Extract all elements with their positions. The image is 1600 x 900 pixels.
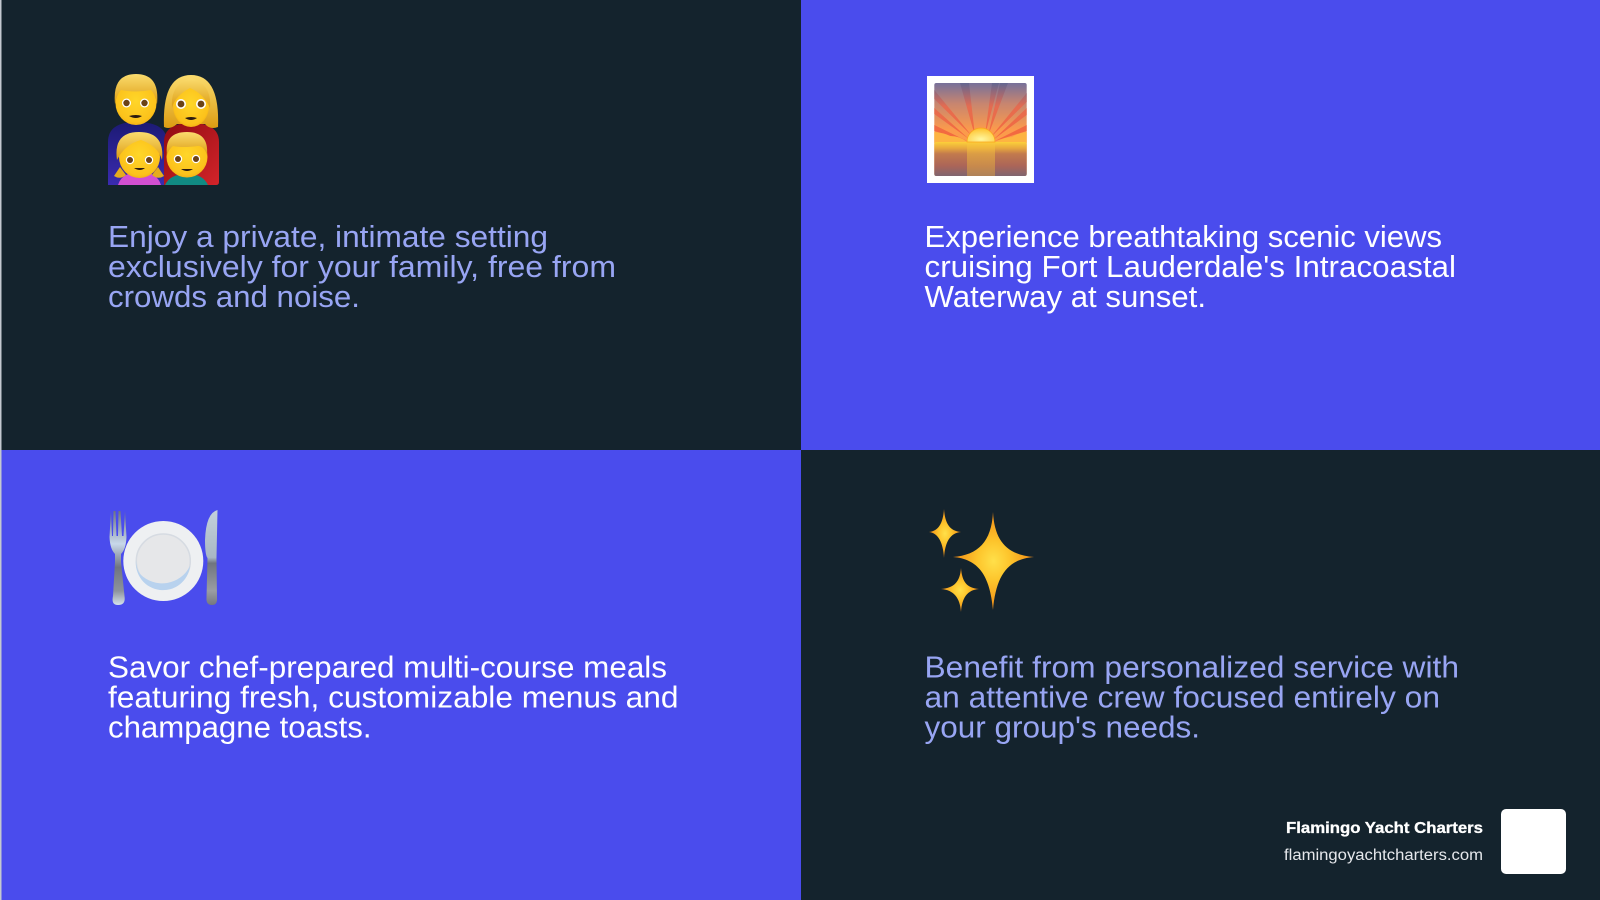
- panel: private setting: [2, 0, 801, 450]
- footer: brand block: [1284, 809, 1566, 874]
- panel: personalized service: [801, 450, 1600, 900]
- icon: sparkles: [929, 509, 1034, 612]
- website url: flamingoyachtcharters.com: [1284, 847, 1483, 864]
- icon: family: [108, 74, 219, 185]
- text: gourmet dining: featuring fresh, customizable menus and: [108, 680, 678, 715]
- text: personalized service: an attentive crew focused entirely on: [924, 680, 1440, 715]
- text: personalized service: your group's needs.: [924, 710, 1200, 745]
- text: private setting: crowds and noise.: [108, 279, 360, 314]
- text: gourmet dining: champagne toasts.: [108, 710, 372, 745]
- text: scenic views: [924, 219, 1456, 314]
- panel: scenic views: [801, 0, 1600, 450]
- text: personalized service: [924, 650, 1459, 745]
- text: scenic views: cruising Fort Lauderdale's Intracoastal: [924, 249, 1456, 284]
- brand name: Flamingo Yacht Charters: [1286, 820, 1483, 837]
- logo placeholder: [1501, 809, 1566, 874]
- icon: sunset picture: [927, 76, 1034, 183]
- text: private setting: [108, 219, 616, 314]
- icon: plate and cutlery: [110, 510, 218, 605]
- text: gourmet dining: [108, 650, 678, 745]
- text: gourmet dining: Savor chef-prepared multi-course meals: [108, 650, 667, 685]
- panel: gourmet dining: [2, 450, 801, 900]
- text: scenic views: Waterway at sunset.: [924, 279, 1206, 314]
- text: private setting: Enjoy a private, intimate setting: [108, 219, 548, 254]
- text: private setting: exclusively for your family, free from: [108, 249, 616, 284]
- left edge line: [0, 0, 2, 900]
- text: personalized service: Benefit from personalized service with: [924, 650, 1459, 685]
- text: scenic views: Experience breathtaking scenic views: [924, 219, 1442, 254]
